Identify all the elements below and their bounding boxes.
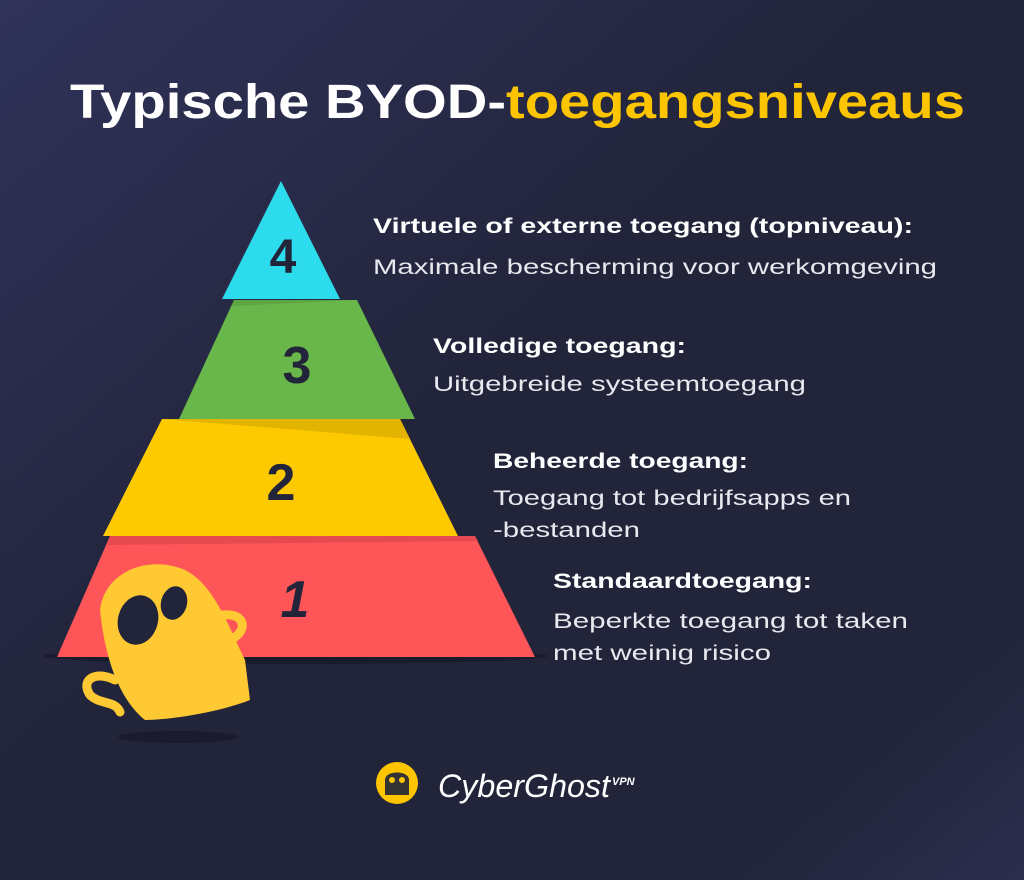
tier 1 red [57, 536, 535, 657]
tier 2 yellow: 2 [267, 454, 295, 512]
text: tier 4: Maximale bescherming voor werkomgeving [373, 256, 937, 279]
tier 1 red: 1 [281, 571, 309, 629]
tier 3 green: 3 [283, 337, 311, 395]
title: Typische BYOD- toegangsniveaus [70, 76, 965, 129]
ghost mascot [87, 564, 250, 743]
logo: CyberGhost [438, 768, 611, 804]
text: tier 1: met weinig risico [553, 642, 771, 665]
text: tier 4 [373, 215, 937, 279]
pyramid [44, 181, 548, 664]
logo: VPN [612, 776, 636, 788]
text: tier 3: Volledige toegang: [433, 335, 686, 358]
text: tier 2: Beheerde toegang: [493, 450, 748, 473]
tier 3 green [179, 300, 415, 419]
tier 4 cyan [222, 181, 340, 299]
text: tier 4: Virtuele of externe toegang (topniveau): [373, 215, 913, 238]
text: tier 2 [493, 450, 851, 542]
text: tier 2: -bestanden [493, 519, 640, 542]
text: tier 2: Toegang tot bedrijfsapps en [493, 487, 851, 510]
tier 2 yellow [103, 419, 458, 536]
text: tier 3 [433, 335, 806, 396]
tier 4 cyan: 4 [270, 231, 297, 284]
text: tier 1: Standaardtoegang: [553, 570, 812, 593]
text: tier 1 [553, 570, 908, 665]
text: tier 1: Beperkte toegang tot taken [553, 610, 908, 633]
text: tier 3: Uitgebreide systeemtoegang [433, 373, 806, 396]
logo [376, 762, 636, 804]
